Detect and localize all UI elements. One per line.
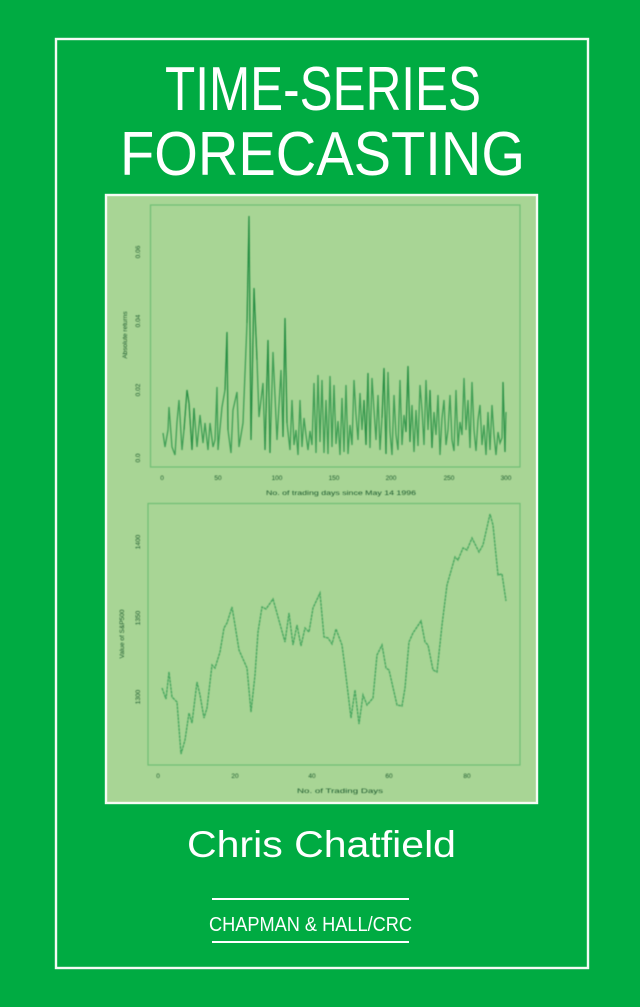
x axis labels: No. of Trading Days xyxy=(297,788,384,795)
x axis labels: 50 xyxy=(214,475,222,482)
y axis labels: 1400 xyxy=(135,534,142,549)
x axis labels: 40 xyxy=(308,773,316,780)
title: TIME-SERIES xyxy=(165,55,481,124)
plot frame xyxy=(148,504,520,765)
y axis labels xyxy=(119,534,142,704)
y axis ticks and labels: 0.02 xyxy=(135,383,142,396)
y axis ticks and labels xyxy=(122,245,142,463)
author: Chris Chatfield xyxy=(187,824,456,865)
x axis labels: 200 xyxy=(386,475,397,482)
data line xyxy=(163,216,506,455)
x axis labels: No. of trading days since May 14 1996 xyxy=(266,490,417,497)
x axis labels: 0 xyxy=(160,475,164,482)
y axis labels: Value of S&P500 xyxy=(119,609,126,659)
title: FORECASTING xyxy=(120,120,525,189)
x axis labels: 100 xyxy=(272,475,283,482)
x axis labels: 20 xyxy=(231,773,239,780)
y axis ticks and labels: 0.06 xyxy=(135,245,142,258)
plot frame xyxy=(150,205,520,467)
x axis labels: 0 xyxy=(156,773,160,780)
x axis labels: 80 xyxy=(463,773,471,780)
x axis labels: 60 xyxy=(385,773,393,780)
x axis labels: 300 xyxy=(501,475,512,482)
y axis ticks and labels: 0.04 xyxy=(135,314,142,327)
x axis labels: 150 xyxy=(329,475,340,482)
x axis labels xyxy=(160,475,512,497)
x axis labels: 250 xyxy=(444,475,455,482)
chart: value of S&P500 xyxy=(119,504,520,795)
y axis ticks and labels: 0.0 xyxy=(135,453,142,463)
panel: charts xyxy=(106,195,537,803)
chart: absolute returns xyxy=(122,205,520,497)
y axis labels: 1350 xyxy=(135,610,142,625)
x axis labels xyxy=(156,773,471,795)
y axis labels: 1300 xyxy=(135,689,142,704)
publisher: CHAPMAN & HALL/CRC xyxy=(209,914,412,936)
dark spike accents xyxy=(184,216,505,454)
data line xyxy=(162,514,506,754)
y axis ticks and labels: Absolute returns xyxy=(122,311,129,359)
title xyxy=(120,55,525,189)
outer white frame xyxy=(56,39,588,968)
